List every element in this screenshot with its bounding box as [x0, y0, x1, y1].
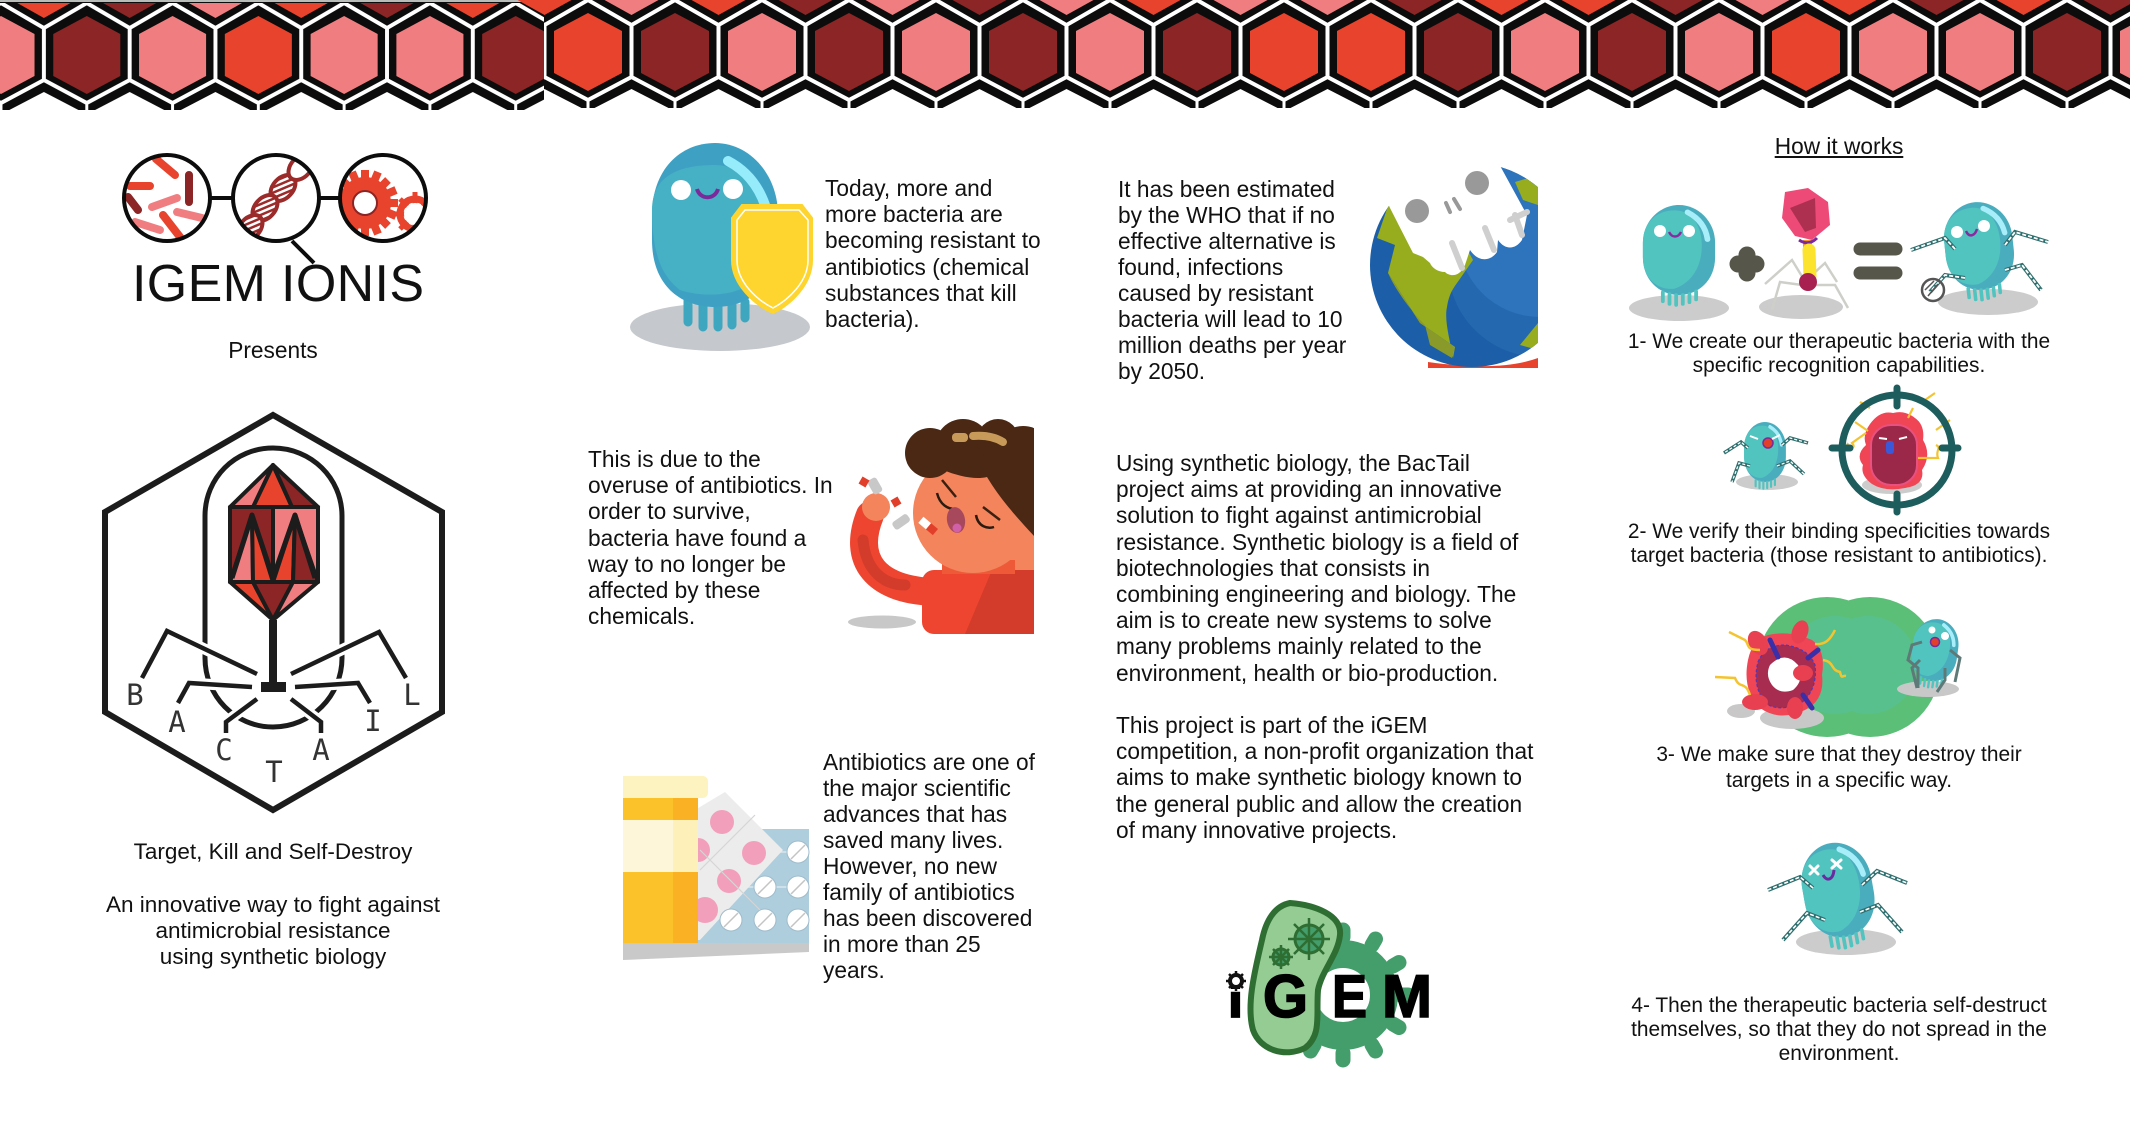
text: resistant bacteria: bacteria). [825, 306, 920, 332]
wordmark: i [1228, 975, 1243, 1027]
BACTAIL letters [126, 678, 421, 789]
BACTAIL letters: A [168, 705, 186, 739]
header banner: right honeycomb strip [518, 0, 2130, 108]
text: overuse of antibiotics [588, 446, 833, 629]
hexagon frame [105, 415, 442, 810]
text: WHO estimate: bacteria will lead to 10 [1118, 306, 1342, 332]
BACTAIL letters: L [403, 678, 421, 712]
BACTAIL letters: I [364, 704, 382, 738]
text: step 2 [1628, 520, 2050, 567]
step 4 illustration: dead bacterium [1768, 837, 1907, 955]
logo: magnifier links and rings [124, 155, 426, 263]
text: resistant bacteria: becoming resistant to [825, 227, 1041, 253]
BacTail hexagon logo [105, 415, 442, 810]
text: step 4: themselves, so that they do not spread in the [1631, 1018, 2047, 1041]
text: resistant bacteria: more bacteria are [825, 201, 1003, 227]
shadows [1727, 704, 1755, 718]
text: BacTail project [1116, 450, 1518, 686]
text: project summary [106, 892, 440, 969]
phage [1759, 188, 1848, 319]
pink tablets [686, 810, 766, 923]
text: resistant bacteria [825, 175, 1041, 332]
text: resistant bacteria: Today, more and [825, 175, 992, 201]
icon: person swallowing pills [848, 419, 1053, 634]
text: iGEM competition: This project is part of the iGEM [1116, 712, 1427, 738]
plus sign [1738, 255, 1756, 273]
white tablets [720, 841, 809, 931]
BACTAIL letters: A [312, 733, 330, 767]
text: WHO estimate: million deaths per year [1118, 332, 1346, 358]
wordmark [1228, 963, 1432, 1030]
text: WHO estimate: caused by resistant [1118, 280, 1313, 306]
text: step 1: 1- We create our therapeutic bacteria with the [1628, 330, 2050, 353]
text: step 4 [1631, 994, 2047, 1065]
text: overuse of antibiotics: This is due to the [588, 446, 761, 472]
text: WHO estimate: by 2050. [1118, 358, 1205, 384]
text: step 3: targets in a specific way. [1726, 769, 1952, 792]
text: BacTail project: aim is to create new systems to solve [1116, 607, 1492, 633]
text: overuse of antibiotics: way to no longer be [588, 551, 786, 577]
text: antibiotics history [823, 749, 1035, 983]
phage legs [142, 631, 406, 733]
wordmark: E [1332, 963, 1367, 1030]
text: antibiotics history: advances that has [823, 801, 1007, 827]
equals sign [1860, 249, 1896, 273]
text: iGEM competition [1116, 712, 1534, 843]
text: project summary: using synthetic biology [160, 944, 386, 969]
logo circle: DNA helix [241, 160, 310, 236]
logo: iGEM IONIS [122, 153, 428, 302]
text: iGEM competition: the general public and allow the creation [1116, 791, 1522, 817]
green zones [1757, 597, 1897, 737]
text: BacTail project: environment, health or bio-production. [1116, 660, 1498, 686]
crosshair [1832, 388, 1958, 512]
therapeutic bacterium [1907, 616, 1962, 692]
text: WHO estimate [1118, 176, 1346, 384]
BACTAIL letters: B [126, 678, 144, 712]
text: overuse of antibiotics: bacteria have found a [588, 525, 806, 551]
shield [732, 205, 812, 313]
logo circle: gears [342, 170, 424, 236]
text: BacTail project: solution to fight against antimicrobial [1116, 502, 1482, 528]
phage tail and baseplate [269, 620, 277, 682]
wordmark: G [1263, 963, 1308, 1030]
text: iGEM competition: of many innovative projects. [1116, 817, 1397, 843]
text: iGEM competition: competition, a non-profit organization that [1116, 738, 1533, 764]
text: iGEM competition: aims to make synthetic biology known to [1116, 764, 1522, 790]
logo wordmark: IGEM IONIS [132, 255, 424, 313]
text: tagline: Target, Kill and Self-Destroy [134, 839, 412, 864]
text: BacTail project: resistance. Synthetic biology is a field of [1116, 529, 1518, 555]
text: step 3 [1656, 743, 2022, 792]
text: antibiotics history: has been discovered [823, 905, 1032, 931]
capsule outline [205, 448, 342, 727]
wordmark: M [1382, 963, 1432, 1030]
bacterium outline [1250, 903, 1340, 1052]
BACTAIL letters: C [215, 733, 233, 767]
step 2 illustration [1724, 388, 1958, 512]
icon: pills and bottle [623, 776, 809, 960]
text: overuse of antibiotics: affected by these [588, 577, 760, 603]
text: antibiotics history: However, no new [823, 853, 997, 879]
step 3 illustration [1715, 597, 1962, 737]
text: resistant bacteria: substances that kill [825, 280, 1017, 306]
icon: bacterium with shield [630, 143, 812, 351]
text: step 4: environment. [1779, 1042, 1899, 1065]
green gear [1278, 930, 1408, 1060]
step 1 illustration [1629, 188, 2048, 321]
text: overuse of antibiotics: overuse of antibiotics. In [588, 472, 833, 498]
text: BacTail project: project aims at providing an innovative [1116, 476, 1502, 502]
text: BacTail project: many problems mainly related to the [1116, 633, 1482, 659]
engineered bacterium [1911, 199, 2048, 315]
logo circle: bacteria [128, 159, 202, 237]
bottle [623, 798, 698, 943]
text: step 4: 4- Then the therapeutic bacteria self-destruct [1631, 994, 2047, 1017]
phage head [230, 465, 318, 620]
text: resistant bacteria: antibiotics (chemical [825, 254, 1029, 280]
text: step 1 [1628, 330, 2050, 377]
text: WHO estimate: by the WHO that if no [1118, 202, 1335, 228]
text: step 1: specific recognition capabilities. [1693, 354, 1985, 377]
heading: how it works: How it works [1775, 133, 1903, 159]
text: BacTail project: biotechnologies that consists in [1116, 555, 1430, 581]
text: step 2: 2- We verify their binding specificities towards [1628, 520, 2050, 543]
text: BacTail project: combining engineering and biology. The [1116, 581, 1516, 607]
text: project summary: antimicrobial resistance [155, 918, 391, 943]
BACTAIL letters: T [265, 755, 283, 789]
text: antibiotics history: Antibiotics are one of [823, 749, 1035, 775]
lysed target bacterium [1715, 618, 1846, 719]
text: WHO estimate: It has been estimated [1118, 176, 1335, 202]
icon: globe with skull [1370, 167, 1538, 368]
logo: iGEM [1226, 903, 1432, 1060]
text: overuse of antibiotics: order to survive, [588, 498, 751, 524]
text: antibiotics history: years. [823, 957, 885, 983]
header banner: left honeycomb strip [0, 0, 559, 110]
text: step 2: target bacteria (those resistant to antibiotics). [1631, 544, 2047, 567]
text: step 3: 3- We make sure that they destroy their [1656, 743, 2022, 766]
text: antibiotics history: in more than 25 [823, 931, 981, 957]
text: BacTail project: Using synthetic biology, the BacTail [1116, 450, 1470, 476]
text: antibiotics history: the major scientific [823, 775, 1011, 801]
targeted resistant bacterium [1832, 388, 1958, 512]
text: WHO estimate: effective alternative is [1118, 228, 1336, 254]
text: antibiotics history: saved many lives. [823, 827, 1003, 853]
small gear on i [1230, 975, 1242, 987]
text: antibiotics history: family of antibiotics [823, 879, 1015, 905]
text: presents: Presents [228, 337, 318, 363]
text: overuse of antibiotics: chemicals. [588, 603, 695, 629]
bacterium [1629, 205, 1729, 321]
text: WHO estimate: found, infections [1118, 254, 1283, 280]
inner gears [1273, 925, 1323, 965]
text: project summary: An innovative way to fight against [106, 892, 440, 917]
therapeutic bacterium [1724, 422, 1808, 490]
